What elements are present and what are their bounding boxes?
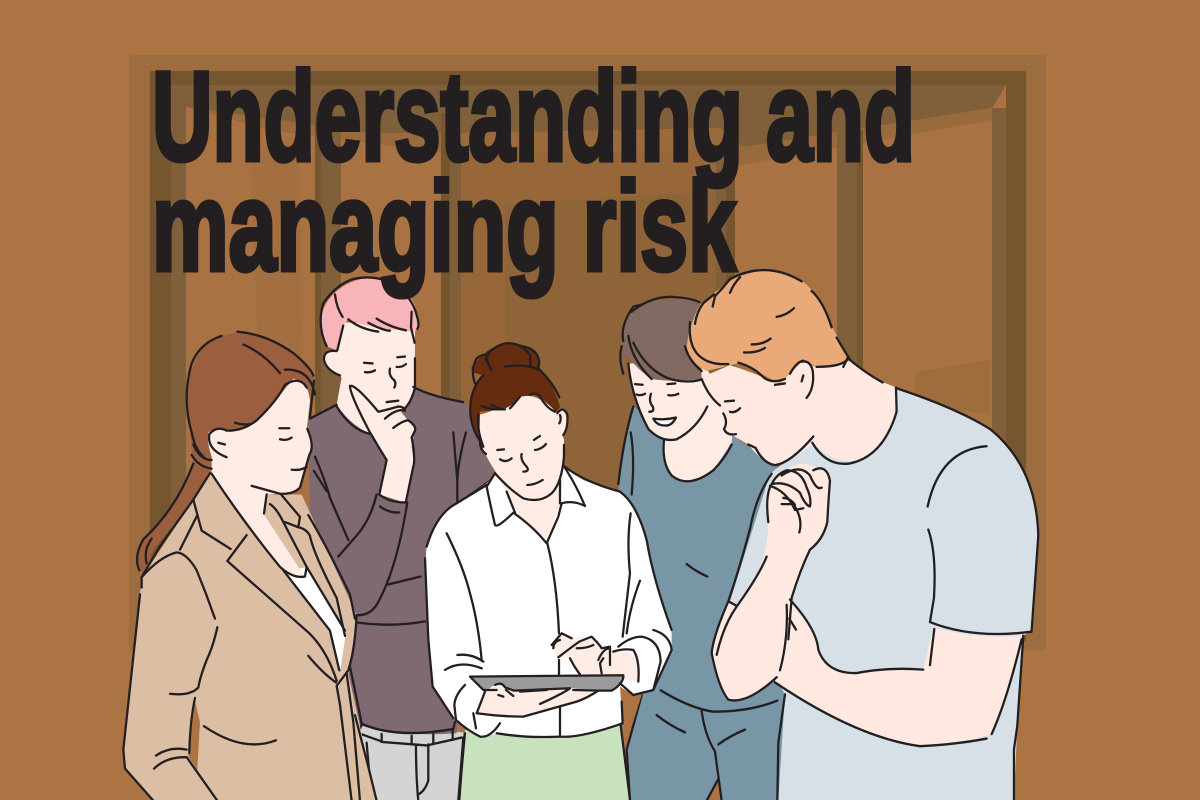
- outlines: [310, 277, 490, 800]
- outlines: [685, 270, 1038, 800]
- hand under tablet: [477, 683, 598, 717]
- head and neck: [702, 360, 897, 465]
- title: [152, 46, 915, 297]
- white top: [283, 568, 346, 672]
- teal top and trousers: [618, 405, 787, 800]
- green skirt: [459, 723, 630, 800]
- illustration: woman with white shirt and tablet: [425, 343, 672, 800]
- tablet: [470, 676, 623, 692]
- smile: [653, 418, 676, 426]
- forearm and hand: [712, 463, 830, 700]
- face and chest: [478, 396, 564, 540]
- gap between arm and body: [188, 701, 200, 770]
- illustration: man with pink hair: [308, 277, 493, 800]
- face and neck: [627, 363, 733, 482]
- ponytail: [138, 463, 210, 575]
- pink hair: [320, 277, 419, 350]
- hair: [470, 343, 560, 440]
- gap behind her leg: [617, 688, 643, 753]
- illustration: woman with teal top: [617, 297, 787, 800]
- hair: [187, 332, 315, 467]
- t-shirt: [730, 388, 1038, 800]
- jumper: [308, 387, 493, 734]
- upper arm: [775, 600, 1022, 746]
- illustration: woman in beige jacket: [123, 332, 377, 800]
- outlines: [123, 332, 377, 800]
- gap beside skirt: [620, 683, 642, 748]
- trousers: [360, 724, 463, 800]
- orange hair: [687, 271, 849, 384]
- brown hair: [620, 299, 702, 381]
- title line 2: managing risk: [152, 156, 737, 297]
- face and neck: [208, 379, 312, 577]
- ear: [557, 410, 567, 435]
- jacket: [123, 473, 377, 800]
- illustration: man in light blue t-shirt: [685, 270, 1038, 800]
- hands: [552, 633, 638, 682]
- hand: [350, 386, 415, 503]
- white shirt: [426, 467, 672, 738]
- outlines: [425, 343, 672, 800]
- head and neck: [323, 322, 415, 436]
- outlines: [618, 297, 777, 800]
